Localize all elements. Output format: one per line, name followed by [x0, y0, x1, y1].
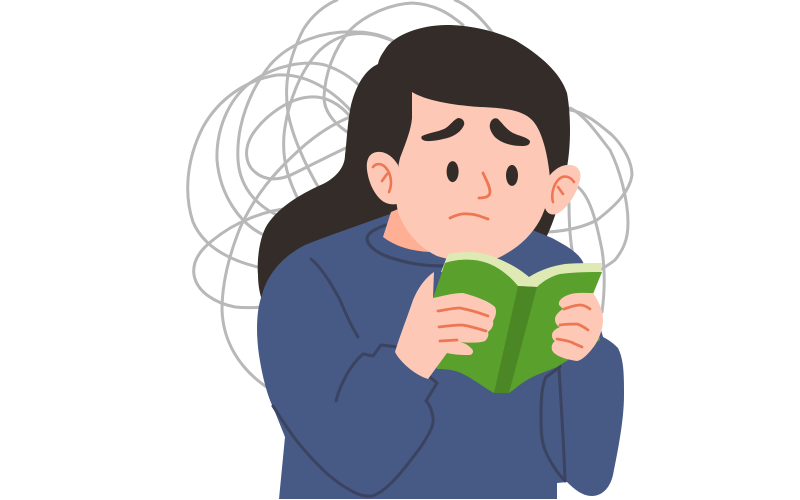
neck [383, 200, 450, 252]
book spine [494, 286, 537, 393]
mouth [450, 214, 488, 219]
eye right [506, 165, 518, 186]
face [396, 92, 550, 261]
hair [258, 25, 570, 300]
collar line [367, 225, 445, 266]
eyebrow right [490, 118, 530, 146]
shoulder crease [311, 259, 358, 337]
eyebrow left [421, 118, 464, 141]
left hand [395, 272, 496, 379]
sweater body [257, 214, 624, 499]
right hand [552, 293, 603, 361]
sleeve folds [273, 345, 565, 496]
left ear [367, 152, 399, 204]
book cover [430, 260, 602, 393]
book pages [441, 252, 602, 290]
eye left [447, 161, 459, 182]
right ear [545, 165, 581, 215]
scribble: tangled thought lines [188, 0, 632, 388]
book [430, 252, 602, 393]
nose [479, 173, 490, 198]
